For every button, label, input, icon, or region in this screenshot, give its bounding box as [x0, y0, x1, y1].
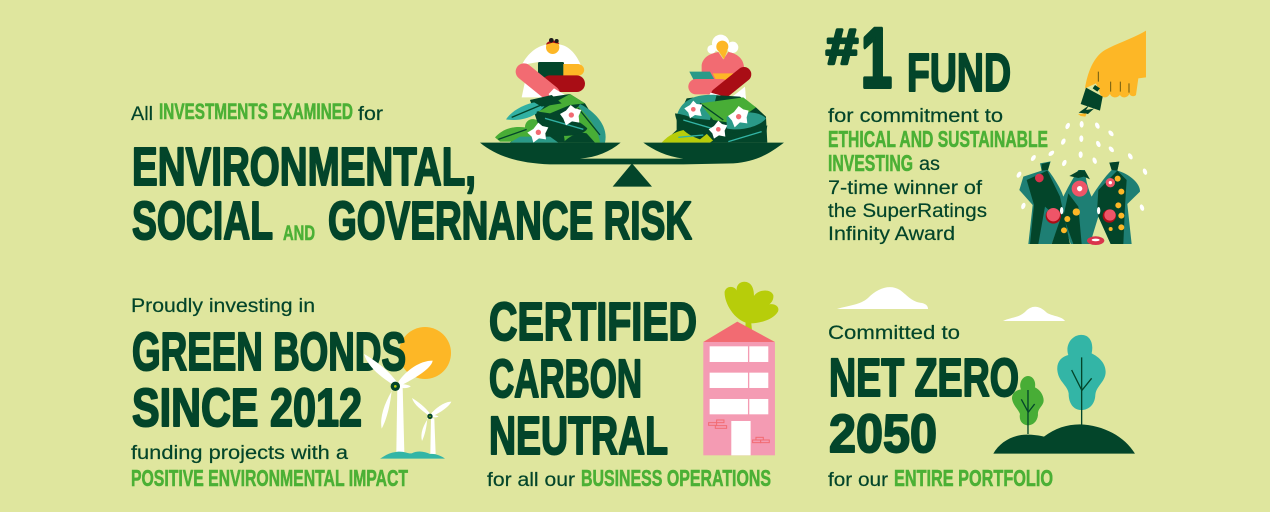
text: for all our business operations: for all our — [487, 470, 576, 491]
heading: #1 fund: FUND — [907, 43, 1011, 103]
hand — [1085, 31, 1146, 97]
door — [731, 421, 751, 455]
heading: certified carbon neutral: NEUTRAL — [489, 406, 668, 466]
illustration: wind turbines — [364, 354, 451, 459]
panel: carbon neutral — [487, 282, 778, 491]
left leaf pile — [495, 94, 606, 143]
heading: net zero 2050: 2050 — [829, 404, 937, 464]
text: for all our business operations: BUSINESS OPERATIONS — [581, 465, 771, 491]
right leaf pile — [662, 95, 767, 143]
heading: environmental, social and governance risk: GOVERNANCE RISK — [328, 191, 692, 251]
scale trays, beam and fulcrum — [480, 143, 784, 187]
teal tree — [1057, 335, 1106, 425]
roof — [703, 322, 775, 342]
heading: certified carbon neutral: CARBON — [489, 349, 642, 409]
illustration: small cloud — [1003, 307, 1065, 321]
watering can — [1078, 85, 1103, 117]
right flowers — [684, 101, 749, 139]
green tree — [1012, 376, 1044, 434]
text: ethical and sustainable investing award — [828, 106, 1048, 245]
panel: net zero — [828, 287, 1135, 491]
text: for our entire portfolio — [828, 465, 1053, 491]
heading: certified carbon neutral — [489, 292, 697, 466]
illustration: sun — [399, 327, 451, 379]
panel: number one fund — [826, 11, 1148, 245]
text: funding projects: funding projects with a — [131, 443, 348, 464]
text: ethical and sustainable investing award: Infinity Award — [828, 224, 955, 245]
text: ethical and sustainable investing award: ETHICAL AND SUSTAINABLE — [828, 126, 1048, 152]
heading: #1 fund: 1 — [861, 11, 892, 105]
illustration: trees on hills — [993, 335, 1135, 454]
heading: environmental, social and governance risk: SOCIAL — [132, 191, 273, 251]
bricks — [709, 420, 769, 443]
left flowers — [527, 105, 581, 143]
building body — [703, 342, 775, 455]
text: investments examined intro: All — [131, 104, 153, 125]
right person — [689, 35, 746, 105]
heading: #1 fund: # — [826, 19, 858, 75]
panel: green bonds — [131, 296, 451, 491]
text: for our entire portfolio: ENTIRE PORTFOLIO — [894, 465, 1053, 491]
illustration: pink building with plant — [703, 282, 778, 455]
heading: net zero 2050 — [829, 348, 1019, 464]
small turbine — [412, 398, 451, 454]
heading: green bonds since 2012: SINCE 2012 — [132, 378, 362, 438]
grass mound — [380, 451, 445, 459]
heading: #1 fund — [826, 11, 1011, 105]
text: proudly investing in: Proudly investing in — [131, 296, 315, 317]
text: ethical and sustainable investing award: as — [919, 154, 940, 175]
heading: green bonds since 2012: GREEN BONDS — [132, 322, 406, 382]
panel: ESG risk — [131, 35, 784, 251]
heading: environmental, social and governance risk: ENVIRONMENTAL, — [132, 137, 476, 197]
text: positive environmental impact: POSITIVE ENVIRONMENTAL IMPACT — [131, 465, 408, 491]
large turbine — [364, 354, 433, 452]
text: for our entire portfolio: for our — [828, 470, 889, 491]
plant — [725, 282, 778, 330]
text: for all our business operations — [487, 465, 771, 491]
illustration: hand watering three people — [1016, 31, 1148, 245]
illustration: balance scale with two people on leaves — [480, 35, 784, 187]
text: ethical and sustainable investing award: the SuperRatings — [828, 201, 987, 222]
three people silhouettes — [1019, 161, 1140, 245]
illustration: large cloud — [837, 287, 928, 309]
text: investments examined intro: INVESTMENTS EXAMINED — [159, 99, 353, 124]
left person — [522, 38, 584, 104]
windows — [710, 346, 768, 414]
text: committed to: Committed to — [828, 323, 960, 344]
text: ethical and sustainable investing award: 7-time winner of — [828, 178, 983, 199]
text: investments examined intro: for — [358, 104, 384, 125]
text: ethical and sustainable investing award: INVESTING — [828, 150, 913, 176]
heading: green bonds since 2012 — [132, 322, 406, 438]
hills — [993, 424, 1135, 454]
heading: environmental, social and governance risk: AND — [283, 222, 315, 245]
water drops — [1016, 121, 1148, 211]
heading: net zero 2050: NET ZERO — [829, 348, 1019, 408]
heading: certified carbon neutral: CERTIFIED — [489, 292, 697, 352]
text: ethical and sustainable investing award: for commitment to — [828, 106, 1003, 127]
heading: environmental, social and governance risk — [132, 137, 692, 251]
